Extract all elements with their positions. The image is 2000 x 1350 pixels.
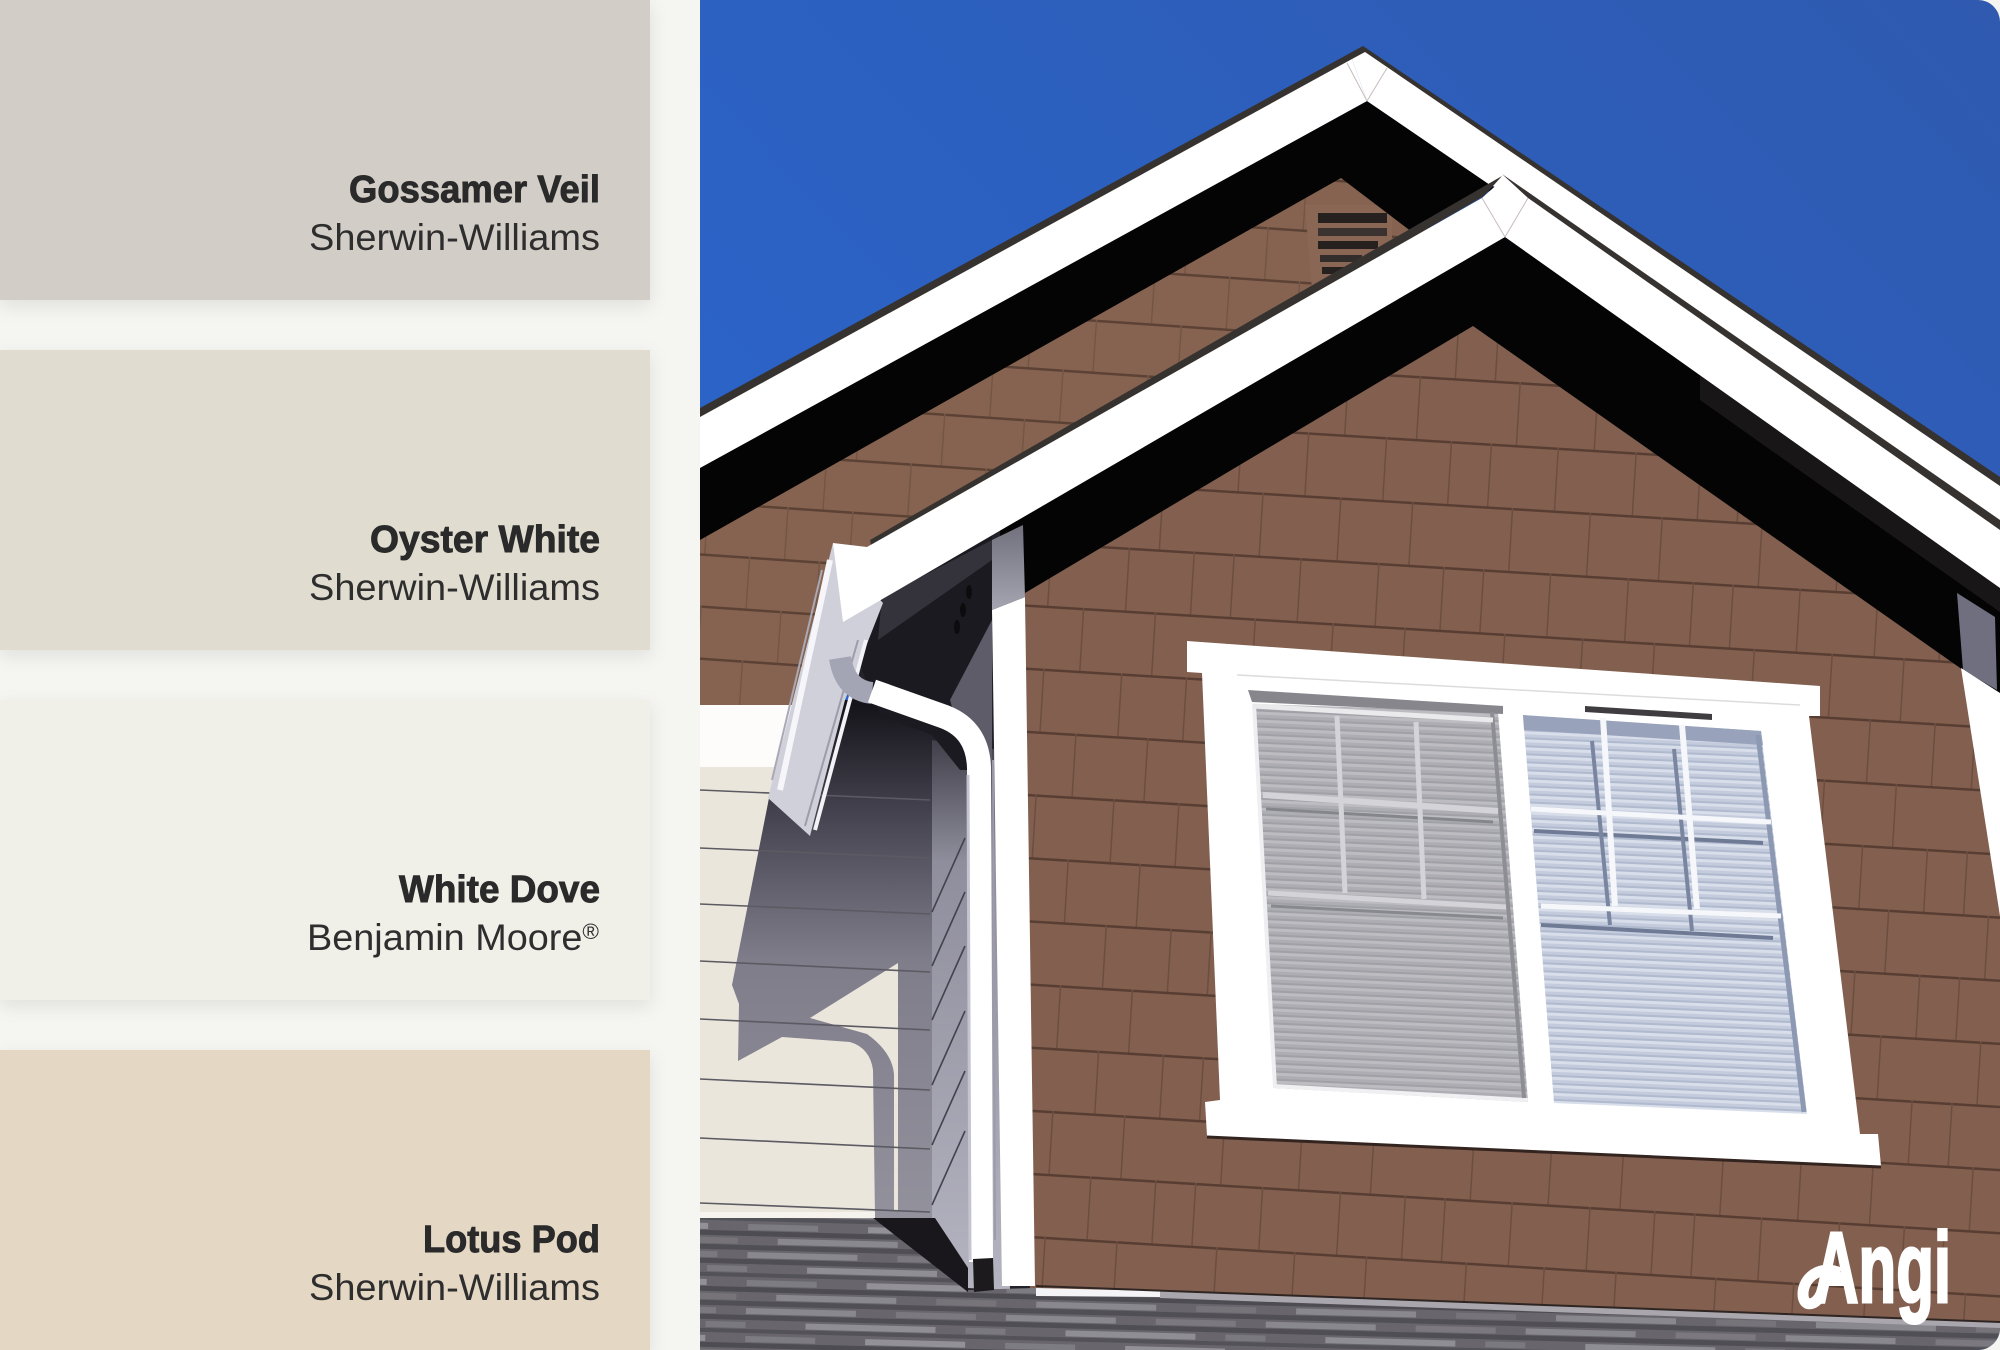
dark gable underside [861,536,992,773]
right corner trim [1961,668,2000,916]
recessed side wall [932,740,1010,1290]
downspout and gutter [840,658,995,1262]
brand: Sherwin-Williams: Sherwin-Williams [309,567,600,608]
back gable soffit shadow [700,101,1495,540]
right sash blinds [1523,715,1807,1114]
left cream siding wall [700,705,898,1221]
color name: Lotus Pod: Lotus Pod [423,1219,600,1261]
left sash muntins [1253,706,1506,918]
panel: Gossamer Veil swatch [0,0,650,300]
brand: Benjamin Moore: ® [582,919,599,944]
window trim [1187,641,1881,1166]
front gable roof edge and white fascia [833,174,2000,622]
brand: Sherwin-Williams: Sherwin-Williams [309,1267,600,1308]
downspout outlet [973,1258,994,1292]
panel: Lotus Pod swatch [0,1050,650,1350]
color name: White Dove: White Dove [399,869,600,911]
panel: White Dove swatch [0,700,650,1000]
shingled roof [700,1212,2000,1350]
panel: Oyster White swatch [0,350,650,650]
panel: house photo illustration [700,0,2000,1350]
gable vent [1305,205,1392,290]
back gable roof edge and white fascia [700,46,2000,530]
color name: Oyster White: Oyster White [370,519,600,561]
right sash muntins [1531,718,1781,938]
cast shadow on siding [732,700,932,1218]
white corner column [992,525,1035,1286]
brand: Benjamin Moore: Benjamin Moore [307,917,576,958]
rake board [768,543,883,836]
Angi logo [1798,1228,1948,1325]
brand: Sherwin-Williams: Sherwin-Williams [309,217,600,258]
front gable soffit shadow [1000,237,2000,693]
soffit highlight and right gutter return [1700,374,2000,690]
front gable siding [1025,326,2000,1335]
under-eave base behind gutter [852,530,1030,1290]
blue sky [700,0,2000,1350]
left sash blinds [1254,704,1528,1102]
color name: Gossamer Veil: Gossamer Veil [349,169,600,211]
window [1187,641,1881,1167]
back gable siding [700,178,1429,705]
siding lines [700,790,930,1212]
